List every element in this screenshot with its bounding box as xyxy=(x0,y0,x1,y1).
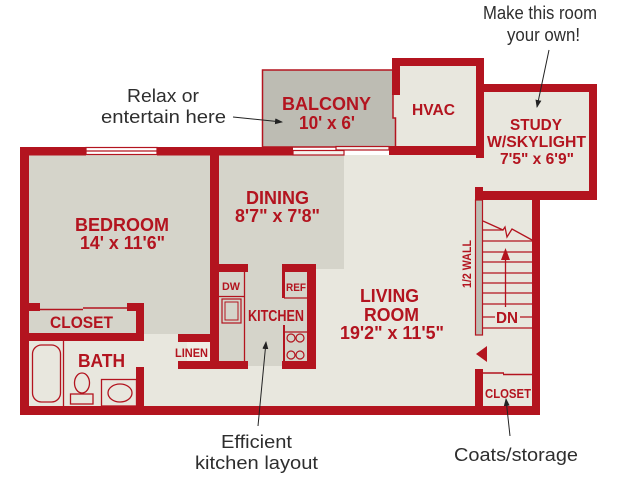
linen closet xyxy=(175,342,210,361)
arrow: study xyxy=(537,50,549,107)
icon: bathtub xyxy=(32,345,60,402)
panel: living room xyxy=(340,286,444,343)
callout: study: your own! xyxy=(507,25,580,45)
panel: bedroom closet xyxy=(29,308,136,333)
callout: study: Make this room xyxy=(483,3,597,23)
refrigerator label: REF xyxy=(286,282,306,294)
arrow: kitchen xyxy=(258,342,266,426)
dishwasher label: DW xyxy=(222,281,241,293)
dining heading: DINING xyxy=(246,188,309,208)
panel: balcony xyxy=(262,70,396,147)
callout: kitchen: kitchen layout xyxy=(195,453,318,473)
stair direction arrow xyxy=(501,248,510,307)
icon: toilet xyxy=(70,373,93,404)
stairs xyxy=(483,221,532,328)
panel: bath fixtures xyxy=(32,341,136,406)
kitchen heading: KITCHEN xyxy=(248,308,304,325)
half wall label: 1/2 WALL xyxy=(460,240,474,288)
living room size: 19'2" x 11'5" xyxy=(340,323,444,343)
study subheading: W/SKYLIGHT xyxy=(487,134,587,151)
panel: walls xyxy=(20,58,597,415)
bath label: BATH xyxy=(78,351,125,371)
callout: closet xyxy=(454,399,578,465)
arrow: closet xyxy=(506,399,510,436)
entry closet label: CLOSET xyxy=(485,386,531,401)
callout: balcony: Relax or xyxy=(127,86,199,106)
callout: study xyxy=(483,3,597,107)
callout: balcony xyxy=(101,86,282,127)
callout: closet: Coats/storage xyxy=(454,445,578,465)
closet label: CLOSET xyxy=(50,313,114,332)
callout: balcony: entertain here xyxy=(101,107,226,127)
hvac label: HVAC xyxy=(412,102,455,119)
panel: windows xyxy=(86,146,389,155)
arrow: balcony xyxy=(233,117,282,122)
panel: study xyxy=(487,117,587,168)
icon: sink xyxy=(102,380,136,406)
balcony size: 10' x 6' xyxy=(299,113,355,133)
panel: dining xyxy=(219,155,344,269)
panel: bedroom xyxy=(29,155,210,334)
room heading: ROOM xyxy=(364,305,419,325)
living heading: LIVING xyxy=(360,286,419,306)
bedroom size: 14' x 11'6" xyxy=(80,233,165,253)
linen label: LINEN xyxy=(175,346,208,360)
panel: kitchen xyxy=(219,264,307,366)
study heading: STUDY xyxy=(510,117,563,134)
floor plan xyxy=(20,58,597,415)
study size: 7'5" x 6'9" xyxy=(500,151,574,168)
dining size: 8'7" x 7'8" xyxy=(235,206,320,226)
icon: entry arrow xyxy=(476,346,487,362)
half wall xyxy=(460,200,482,335)
bedroom heading: BEDROOM xyxy=(75,215,169,235)
callout: kitchen: Efficient xyxy=(221,432,292,452)
panel: floor background xyxy=(29,66,589,406)
entry closet xyxy=(483,373,532,401)
balcony heading: BALCONY xyxy=(282,94,371,114)
callout: kitchen xyxy=(195,342,318,473)
stairs down label: DN xyxy=(496,310,518,327)
